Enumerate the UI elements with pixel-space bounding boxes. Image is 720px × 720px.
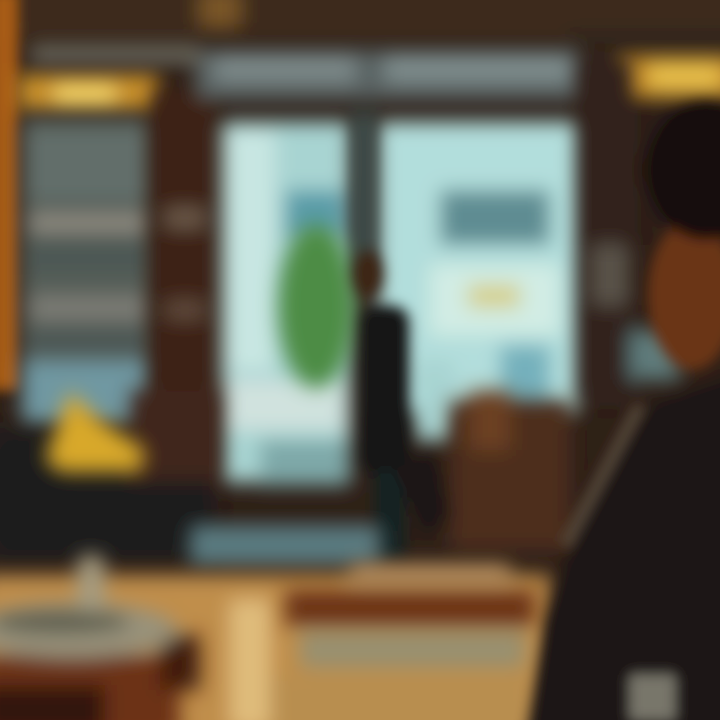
window mullion: [352, 110, 376, 280]
right dark column: [582, 60, 680, 400]
wooden bench: [285, 565, 535, 668]
floor strip: [190, 525, 380, 565]
green shape in window: [278, 224, 354, 388]
standing figure silhouette: [352, 250, 460, 560]
left orange post: [0, 0, 18, 390]
round table foreground: [0, 555, 200, 720]
foreground person: [525, 100, 720, 720]
ceiling light right: [618, 56, 720, 98]
ceiling light left: [18, 74, 158, 110]
ceiling band: [0, 0, 720, 52]
brown column: [152, 90, 214, 510]
lower seating area: [0, 390, 570, 560]
window glass: [222, 122, 578, 485]
upper window band: [30, 45, 580, 100]
left shelf: [22, 118, 152, 428]
yellow cushion: [45, 392, 145, 472]
wooden table bottom left: [0, 575, 550, 720]
